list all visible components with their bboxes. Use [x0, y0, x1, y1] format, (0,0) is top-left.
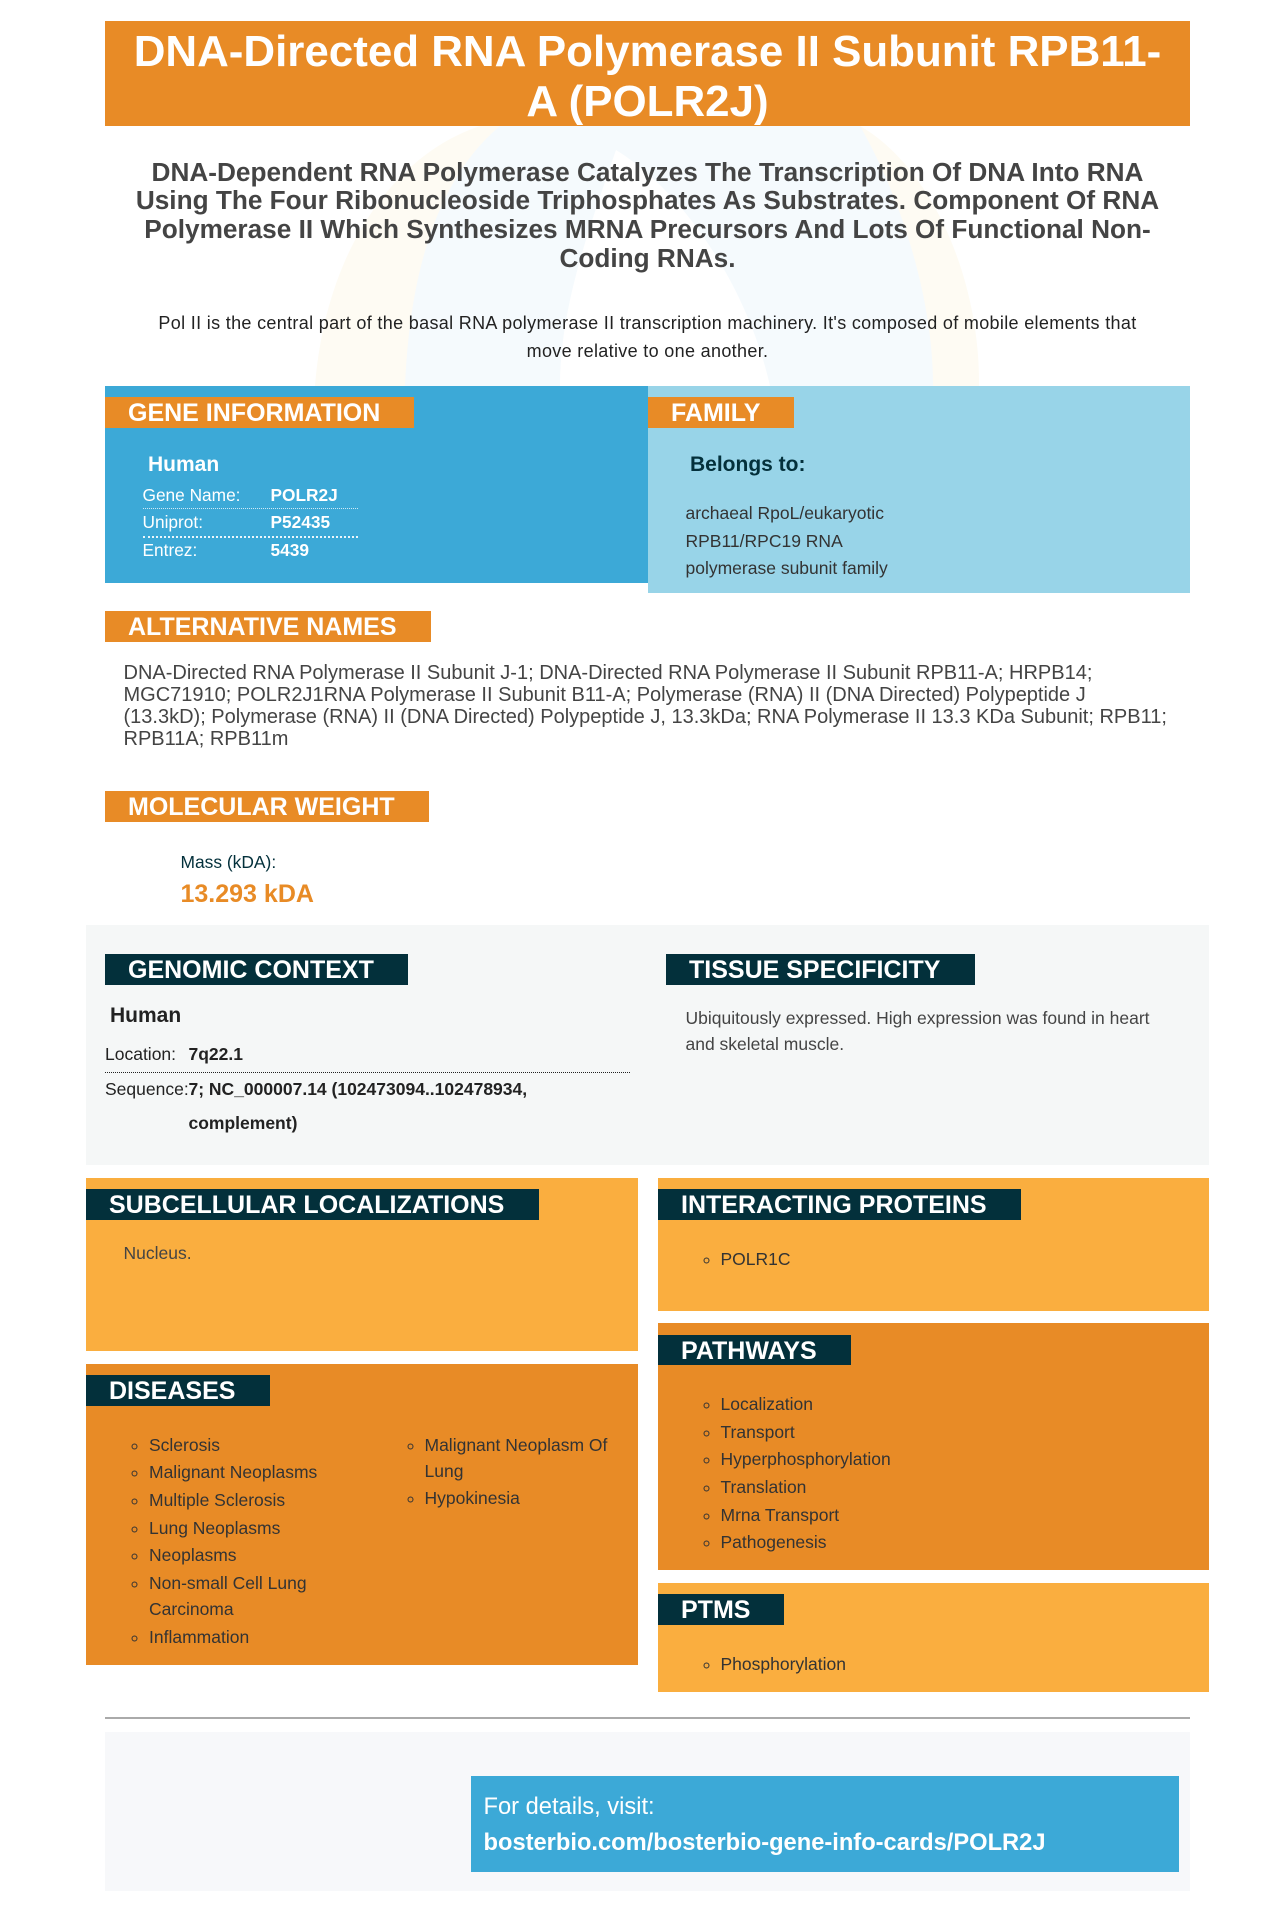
tissue specificity text: Ubiquitously expressed. High expression was found in heart — [686, 1008, 1150, 1028]
intro paragraph — [158, 313, 1137, 361]
gene identifier rows: Uniprot: — [142, 512, 203, 532]
pathways list: Transport — [720, 1422, 795, 1442]
diseases list column one: Non-small Cell Lung Carcinoma — [149, 1573, 307, 1619]
panel: interacting proteins — [658, 1178, 1209, 1311]
callout: details link — [471, 1776, 1179, 1872]
callout url: bosterbio.com/bosterbio-gene-info-cards/POLR2J — [484, 1830, 1046, 1856]
title banner — [105, 21, 1190, 126]
heading: genomic context: GENOMIC CONTEXT — [128, 956, 374, 984]
diseases list column two — [408, 1434, 608, 1508]
heading: pathways — [658, 1335, 851, 1365]
mass label: Mass (kDA): — [180, 852, 276, 872]
location row: Location: — [105, 1044, 176, 1064]
heading: diseases — [86, 1375, 270, 1406]
title banner: DNA-Directed RNA Polymerase II Subunit RPB11- — [134, 27, 1161, 76]
species label: Human — [148, 453, 219, 476]
alternative names text: RPB11A; RPB11m — [124, 728, 288, 750]
gene identifier rows: Gene Name: — [142, 485, 240, 505]
heading: pathways: PATHWAYS — [681, 1337, 817, 1365]
diseases list column one: Malignant Neoplasms — [149, 1462, 317, 1482]
background watermark — [315, 126, 979, 386]
heading: alternative names: ALTERNATIVE NAMES — [128, 613, 397, 641]
gene identifier rows: POLR2J — [270, 485, 338, 505]
subtitle — [136, 156, 1159, 273]
tissue specificity text: and skeletal muscle. — [686, 1034, 844, 1054]
heading: family — [648, 397, 794, 428]
alternative names text: (13.3kD); Polymerase (RNA) II (DNA Directed) Polypeptide J, 13.3kDa; RNA Polymerase II 13.3 KDa Subunit; RPB11; — [124, 706, 1167, 728]
mass value: 13.293 kDA — [180, 880, 314, 908]
diseases list column one: Inflammation — [149, 1627, 249, 1647]
gene identifier rows: 5439 — [270, 540, 309, 560]
diseases list column one: Lung Neoplasms — [149, 1518, 280, 1538]
subcellular text: Nucleus. — [124, 1243, 192, 1263]
diseases list column one: Multiple Sclerosis — [149, 1490, 285, 1510]
alternative names text — [124, 662, 1167, 750]
intro paragraph: Pol II is the central part of the basal RNA polymerase II transcription machinery. It's composed of mobile elements that — [158, 313, 1137, 333]
panel: pathways — [658, 1323, 1209, 1570]
sequence row: complement) — [188, 1113, 297, 1133]
panel: gene information — [105, 386, 648, 583]
heading: ptms: PTMS — [681, 1596, 750, 1624]
panel: subcellular localizations — [86, 1178, 638, 1351]
alternative names text: DNA-Directed RNA Polymerase II Subunit J-1; DNA-Directed RNA Polymerase II Subunit RPB11-A; HRPB14; — [124, 662, 1092, 684]
diseases list column one — [132, 1434, 317, 1647]
gene identifier rows: Entrez: — [142, 540, 197, 560]
pathways list: Translation — [720, 1477, 806, 1497]
sequence row: Sequence: — [105, 1079, 189, 1099]
pathways list: Localization — [720, 1394, 813, 1414]
family text — [686, 503, 888, 578]
diseases list column one: Sclerosis — [149, 1434, 220, 1454]
pathways list — [704, 1394, 891, 1552]
location row: 7q22.1 — [188, 1044, 243, 1064]
ptms list: Phosphorylation — [720, 1654, 846, 1674]
family text: archaeal RpoL/eukaryotic — [686, 503, 884, 523]
tissue specificity text — [686, 1008, 1150, 1054]
gene identifier rows: P52435 — [270, 512, 330, 532]
subtitle: Polymerase II Which Synthesizes MRNA Precursors And Lots Of Functional Non- — [144, 214, 1151, 244]
heading: ptms — [658, 1594, 784, 1625]
location row — [105, 1044, 243, 1064]
subtitle: Using The Four Ribonucleoside Triphosphates As Substrates. Component Of RNA — [136, 185, 1159, 215]
family text: polymerase subunit family — [686, 558, 888, 578]
heading: molecular weight: MOLECULAR WEIGHT — [128, 793, 395, 821]
heading: subcellular localizations: SUBCELLULAR LOCALIZATIONS — [109, 1191, 504, 1219]
intro paragraph: move relative to one another. — [527, 341, 768, 361]
diseases list column two: Hypokinesia — [424, 1488, 520, 1508]
pathways list: Hyperphosphorylation — [720, 1449, 891, 1469]
sequence row: 7; NC_000007.14 (102473094..102478934, — [188, 1079, 527, 1099]
alternative names text: MGC71910; POLR2J1RNA Polymerase II Subunit B11-A; Polymerase (RNA) II (DNA Directed) Polypeptide J — [124, 684, 1086, 706]
title banner: A (POLR2J) — [526, 77, 769, 126]
panel: footer — [105, 1732, 1190, 1891]
subtitle: Coding RNAs. — [559, 243, 736, 273]
gene identifier rows — [142, 485, 358, 560]
panel: ptms — [658, 1583, 1209, 1692]
panel: diseases — [86, 1364, 638, 1664]
diseases list column one: Neoplasms — [149, 1545, 237, 1565]
family text: RPB11/RPC19 RNA — [686, 531, 843, 551]
callout label: For details, visit: — [484, 1794, 655, 1820]
heading: tissue specificity: TISSUE SPECIFICITY — [689, 956, 940, 984]
pathways list: Mrna Transport — [720, 1505, 839, 1525]
panel: genomic context and tissue specificity — [86, 925, 1209, 1165]
heading: diseases: DISEASES — [109, 1377, 235, 1405]
interacting proteins list: POLR1C — [720, 1248, 791, 1268]
heading: interacting proteins: INTERACTING PROTEINS — [681, 1191, 987, 1219]
heading: family: FAMILY — [671, 399, 760, 427]
diseases list column two: Malignant Neoplasm Of Lung — [424, 1434, 607, 1480]
species label: Human — [110, 1004, 181, 1027]
pathways list: Pathogenesis — [720, 1532, 827, 1552]
belongs to label: Belongs to: — [690, 453, 806, 476]
sequence row — [105, 1079, 527, 1133]
panel: family — [648, 386, 1190, 593]
heading: gene information: GENE INFORMATION — [128, 399, 380, 427]
subtitle: DNA-Dependent RNA Polymerase Catalyzes The Transcription Of DNA Into RNA — [152, 156, 1143, 186]
